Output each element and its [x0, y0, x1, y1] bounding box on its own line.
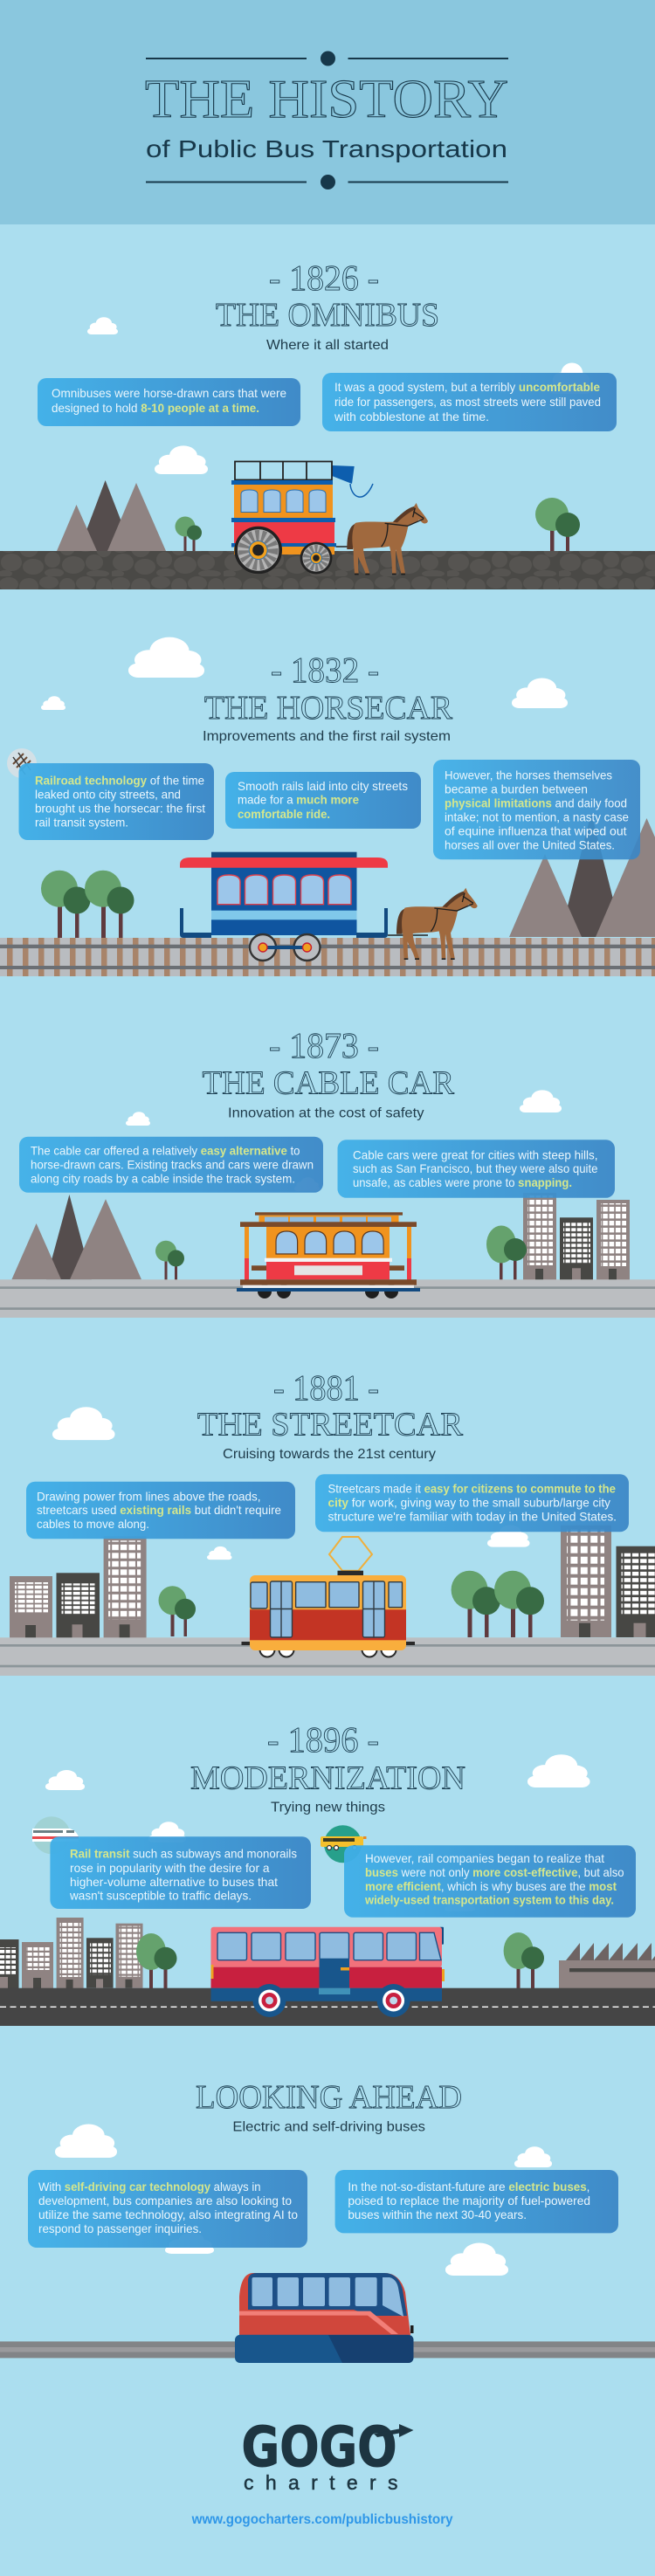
buildings — [523, 1193, 630, 1280]
wheels horsecar — [250, 934, 320, 961]
factory — [559, 1943, 655, 1988]
callout: commute to the city: Streetcars made it easy for citizens to commute to the — [328, 1482, 616, 1496]
heading: the cable car: THE CABLE CAR — [203, 1065, 455, 1102]
callout: rail transit: rose in popularity with the desire for a — [70, 1861, 270, 1875]
callout: smooth rails: made for a much more — [238, 793, 359, 807]
callout: easy alternative: along city roads by a cable inside the track system. — [31, 1171, 295, 1185]
tagline: Where it all started — [266, 338, 389, 353]
callout: easy alternative: The cable car offered a relatively easy alternative to — [31, 1143, 300, 1157]
callout: horse burden: horses all over the United States. — [445, 837, 615, 851]
buildings left — [10, 1536, 147, 1638]
callout: omnibus capacity: Omnibuses were horse-drawn cars that were — [52, 386, 286, 400]
callout: buses more efficient: widely-used transportation system to this day. — [364, 1893, 614, 1907]
callout: railroad technology — [19, 763, 214, 840]
small trees — [155, 1241, 184, 1280]
callout: rail transit: Rail transit such as subways and monorails — [70, 1847, 297, 1861]
callout: commute to the city: structure we're familiar with today in the United States. — [328, 1510, 617, 1524]
callout: horse burden: became a burden between — [445, 782, 588, 796]
section: 1826 the omnibus — [0, 258, 655, 589]
small trees — [175, 517, 202, 551]
cloud — [45, 1770, 85, 1790]
tagline: Trying new things — [271, 1800, 385, 1815]
cloud — [207, 1546, 232, 1560]
mountains — [11, 1195, 141, 1279]
callout: buses more efficient: more efficient, which is why buses are the most — [365, 1879, 617, 1893]
callout: easy alternative — [19, 1137, 323, 1193]
callout: electric buses: buses within the next 30-40 years. — [348, 2208, 527, 2221]
cloud — [52, 1407, 115, 1440]
callout: railroad technology: rail transit system. — [35, 816, 128, 830]
section: looking ahead — [0, 2079, 655, 2527]
future bus — [235, 2273, 414, 2363]
section: 1896 modernization — [0, 1719, 655, 2026]
callout: uncomfortable ride — [322, 373, 617, 431]
cloud — [512, 678, 568, 708]
road with rails — [0, 1279, 655, 1318]
callout: commute to the city: city for work, giving way to the small suburb/large city — [328, 1495, 610, 1509]
tagline: Improvements and the first rail system — [203, 729, 451, 744]
trees — [41, 871, 134, 938]
cloud behind callout — [294, 1177, 320, 1191]
callout: self-driving: With self-driving car technology always in — [38, 2180, 260, 2194]
cloud — [445, 2242, 508, 2276]
railroad track — [0, 938, 655, 976]
cloud behind callout — [165, 2233, 214, 2254]
callout: uncomfortable ride: with cobblestone at the time. — [334, 410, 489, 424]
logo: gogo charters: charters — [244, 2471, 398, 2494]
callout: horse burden: of equine influenza that wiped out — [445, 823, 627, 837]
cloud — [514, 2146, 552, 2167]
callout: buses more efficient — [344, 1845, 636, 1918]
horse — [347, 503, 428, 575]
buildings right — [561, 1526, 655, 1637]
cloud — [41, 696, 66, 710]
callout: smooth rails: Smooth rails laid into city streets — [238, 779, 408, 793]
cloud — [128, 637, 204, 678]
icon: railroad track — [7, 748, 37, 778]
heading: modernization: MODERNIZATION — [190, 1760, 465, 1797]
callout: drawing power: Drawing power from lines above the roads, — [37, 1489, 260, 1503]
callout: uncomfortable ride: It was a good system, but a terribly uncomfortable — [334, 380, 600, 394]
cloud behind callout — [487, 1525, 529, 1547]
callout: uncomfortable ride: ride for passengers, as most streets were still paved — [334, 395, 601, 409]
callout: horse burden — [433, 760, 640, 859]
callout: steep hills: such as San Francisco, but they were also quite — [353, 1161, 598, 1175]
callout: horse burden: However, the horses themselves — [445, 768, 612, 782]
front wheel omnibus — [236, 527, 280, 573]
website url: www.gogocharters.com/publicbushistory — [191, 2512, 453, 2527]
callout: rail transit: wasn't susceptible to traffic delays. — [69, 1889, 252, 1903]
callout: smooth rails: comfortable ride. — [238, 807, 330, 821]
horse — [396, 888, 478, 960]
trees — [452, 1571, 544, 1637]
cloud — [527, 1754, 590, 1787]
callout: buses more efficient: However, rail companies began to realize that — [365, 1851, 604, 1865]
callout: electric buses — [335, 2170, 618, 2233]
omnibus vehicle — [231, 461, 380, 573]
mountains — [509, 813, 655, 937]
year 1881: - 1881 - — [273, 1367, 379, 1408]
year 1826: - 1826 - — [269, 258, 379, 298]
cloud — [55, 2125, 117, 2158]
bus wheels — [253, 1984, 410, 2017]
heading: the horsecar: THE HORSECAR — [204, 690, 453, 727]
road with rails — [0, 1637, 655, 1676]
buildings — [0, 1918, 143, 1988]
callout: rail transit — [50, 1836, 311, 1909]
heading: the streetcar: THE STREETCAR — [197, 1406, 464, 1443]
callout: self-driving: development, bus companies are also looking to — [38, 2194, 292, 2208]
callout: railroad technology: brought us the horsecar: the first — [35, 802, 205, 816]
section: 1832 the horsecar — [0, 637, 655, 976]
callout: drawing power — [26, 1482, 295, 1539]
tagline: Cruising towards the 21st century — [223, 1447, 436, 1462]
cloud behind callout — [445, 1897, 475, 1911]
callout: railroad technology: Railroad technology of the time — [35, 774, 204, 788]
header bottom ornament — [146, 175, 508, 189]
header top ornament — [146, 51, 508, 66]
cloud behind callout — [549, 362, 591, 394]
heading: the omnibus: THE OMNIBUS — [216, 297, 439, 334]
callout: buses more efficient: buses were not only more cost-effective, but also — [365, 1865, 624, 1879]
cloud — [87, 317, 118, 334]
title: THE HISTORY — [145, 70, 508, 129]
tagline: Electric and self-driving buses — [232, 2119, 425, 2134]
tree — [136, 1933, 176, 1988]
road — [0, 1988, 655, 2026]
callout: drawing power: streetcars used existing rails but didn't require — [37, 1503, 281, 1517]
heading: looking ahead: LOOKING AHEAD — [196, 2079, 462, 2116]
icon: school bus on globe — [321, 1825, 367, 1863]
cloud — [155, 445, 208, 474]
year 1873: - 1873 - — [269, 1025, 379, 1065]
header band — [0, 0, 655, 224]
callout: railroad technology: leaked onto city streets, and — [35, 788, 181, 802]
logo: gogo charters: GOGO — [241, 2415, 396, 2479]
callout: rail transit: higher-volume alternative to buses that — [70, 1875, 278, 1889]
callout: steep hills: Cable cars were great for cities with steep hills, — [353, 1147, 597, 1161]
trees — [535, 498, 580, 551]
callout: steep hills — [337, 1140, 615, 1198]
modern bus — [211, 1927, 445, 2017]
cloud — [126, 1112, 150, 1126]
callout: omnibus capacity: designed to hold 8-10 people at a time. — [52, 401, 259, 415]
trees — [486, 1226, 527, 1280]
callout: commute to the city — [315, 1474, 629, 1532]
cloud behind callout — [148, 1822, 186, 1842]
year 1896: - 1896 - — [267, 1719, 379, 1760]
callout: easy alternative: horse-drawn cars. Existing tracks and cars were drawn — [31, 1157, 314, 1171]
callout: horse burden: intake; not to mention, a nasty case — [445, 810, 629, 824]
callout: omnibus capacity — [38, 378, 300, 426]
callout: self-driving: respond to passenger inquiries. — [38, 2221, 202, 2235]
callout: smooth rails — [225, 772, 421, 829]
section: 1881 the streetcar — [0, 1367, 655, 1676]
cobblestone road — [0, 551, 655, 589]
cable car vehicle — [237, 1212, 420, 1298]
callout: electric buses: In the not-so-distant-future are electric buses, — [348, 2180, 590, 2194]
icon: train — [32, 1816, 79, 1854]
tree — [504, 1932, 544, 1988]
callout: horse burden: physical limitations and daily food — [445, 796, 627, 809]
callout: electric buses: poised to replace the majority of fuel-powered — [348, 2194, 590, 2208]
streetcar vehicle — [241, 1537, 415, 1657]
callout: self-driving — [28, 2170, 307, 2248]
section: 1873 the cable car — [0, 1025, 655, 1318]
tagline: Innovation at the cost of safety — [228, 1105, 424, 1120]
road — [0, 2341, 655, 2358]
subtitle: of Public Bus Transportation — [146, 135, 507, 162]
mountains — [57, 480, 166, 551]
callout: steep hills: unsafe, as cables were prone to snapping. — [353, 1175, 572, 1189]
horsecar vehicle — [180, 852, 428, 961]
callout: self-driving: utilize the same technology, also integrating AI to — [38, 2208, 298, 2221]
callout: drawing power: cables to move along. — [37, 1517, 149, 1531]
cloud — [520, 1090, 562, 1112]
rear wheel omnibus — [301, 543, 331, 573]
year 1832: - 1832 - — [271, 650, 379, 690]
tree — [159, 1586, 196, 1636]
